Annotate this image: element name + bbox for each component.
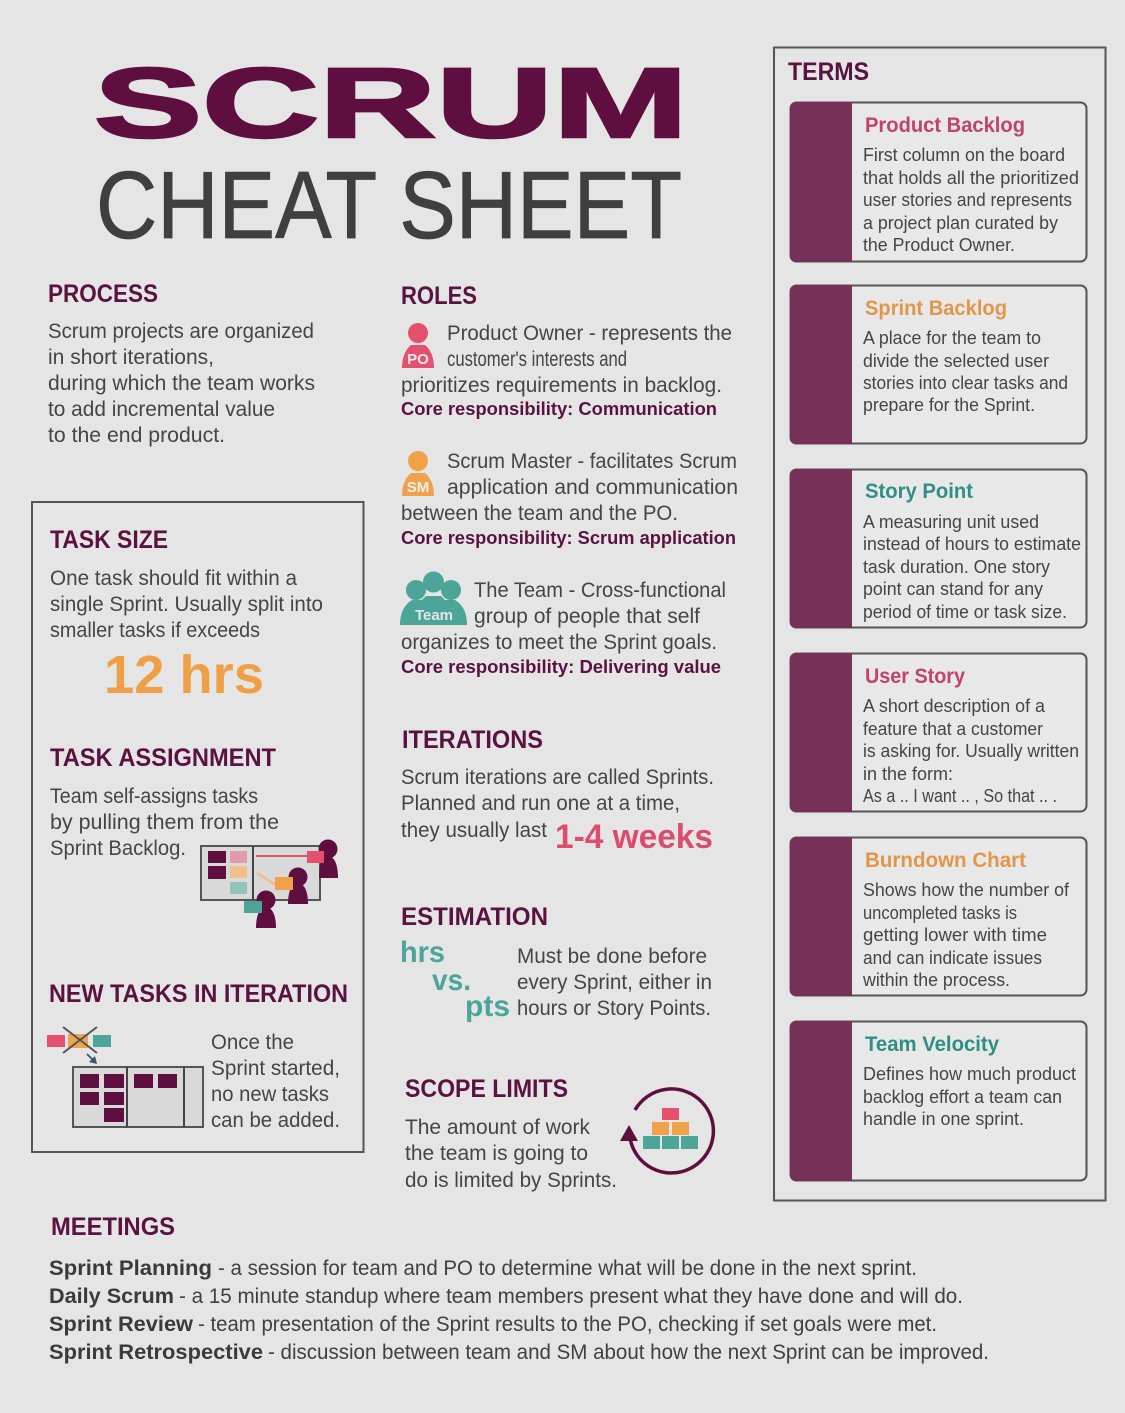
new tasks in iteration: can be added. — [211, 1109, 340, 1132]
term: burndown chart — [790, 837, 1086, 996]
panel: estimation: hrs — [400, 936, 445, 969]
icon: scrum master: SM — [407, 479, 429, 496]
term: product backlog: a project plan curated by — [863, 212, 1059, 233]
panel: process: in short iterations, — [48, 346, 214, 369]
term: team velocity: backlog effort a team can — [863, 1086, 1062, 1107]
term: sprint backlog: stories into clear tasks and — [863, 372, 1068, 393]
task assignment: TASK ASSIGNMENT — [50, 744, 276, 772]
panel: iterations: ITERATIONS — [402, 726, 543, 754]
panel: estimation: every Sprint, either in — [517, 971, 712, 994]
term: sprint backlog: Sprint Backlog — [865, 297, 1007, 320]
panel: scope limits: SCOPE LIMITS — [405, 1075, 568, 1103]
task assignment: by pulling them from the — [50, 811, 279, 834]
title: CHEAT SHEET — [96, 152, 682, 259]
panel: scope limits — [405, 1075, 617, 1192]
term: burndown chart: within the process. — [862, 969, 1010, 990]
team text: group of people that self — [474, 605, 700, 628]
new tasks in iteration: NEW TASKS IN ITERATION — [49, 980, 348, 1008]
term: story point — [790, 469, 1086, 628]
panel: iterations — [401, 726, 714, 856]
panel: meetings: Daily Scrum — [49, 1284, 174, 1308]
panel: meetings — [49, 1213, 989, 1364]
team text: Core responsibility: Delivering value — [401, 656, 721, 677]
panel: task size, assignment and new tasks — [32, 502, 364, 1152]
term: burndown chart: and can indicate issues — [863, 947, 1042, 968]
scrum master text: Scrum Master - facilitates Scrum — [447, 450, 737, 473]
panel: meetings: - team presentation of the Sprint results to the PO, checking if set goals were met. — [198, 1312, 937, 1336]
icon: team — [400, 572, 467, 625]
panel: iterations: 1-4 weeks — [555, 818, 713, 856]
term: product backlog: that holds all the prioritized — [863, 167, 1079, 188]
term: burndown chart: Shows how the number of — [863, 879, 1070, 900]
term: team velocity: handle in one sprint. — [863, 1108, 1024, 1129]
task size: single Sprint. Usually split into — [50, 593, 323, 616]
product owner text: Product Owner - represents the — [447, 322, 732, 345]
term: user story: in the form: — [863, 763, 953, 784]
panel: meetings: - a session for team and PO to determine what will be done in the next sprint. — [218, 1256, 917, 1280]
icon: rejected tasks and board — [47, 1027, 203, 1127]
task size: smaller tasks if exceeds — [50, 619, 260, 642]
product owner text: Core responsibility: Communication — [401, 398, 717, 419]
term: story point: A measuring unit used — [863, 511, 1039, 532]
scrum master text: Core responsibility: Scrum application — [401, 527, 736, 548]
term: product backlog — [790, 102, 1086, 262]
new tasks in iteration: no new tasks — [211, 1083, 329, 1106]
panel: process: to the end product. — [48, 424, 225, 447]
panel: process: during which the team works — [48, 372, 315, 395]
term: sprint backlog: prepare for the Sprint. — [863, 394, 1035, 415]
task size: TASK SIZE — [50, 526, 168, 554]
panel: process: PROCESS — [48, 280, 158, 308]
team text: organizes to meet the Sprint goals. — [401, 631, 717, 654]
term: user story: feature that a customer — [863, 718, 1043, 739]
term: story point: point can stand for any — [863, 578, 1044, 599]
team text: The Team - Cross-functional — [474, 579, 726, 602]
term: team velocity: Team Velocity — [865, 1033, 999, 1056]
term: sprint backlog — [790, 285, 1086, 444]
scrum master text — [401, 450, 738, 548]
term: burndown chart: uncompleted tasks is — [863, 902, 1017, 923]
term: user story: A short description of a — [863, 695, 1046, 716]
term: story point: period of time or task size. — [863, 601, 1067, 622]
term: team velocity — [790, 1021, 1086, 1181]
new tasks in iteration: Sprint started, — [211, 1057, 340, 1080]
product owner text: prioritizes requirements in backlog. — [401, 374, 722, 397]
task assignment — [50, 744, 279, 860]
panel: process — [48, 280, 315, 447]
term: user story — [790, 653, 1086, 812]
panel: scope limits: the team is going to — [405, 1142, 588, 1165]
panel: estimation: ESTIMATION — [401, 903, 548, 931]
panel: estimation: Must be done before — [517, 945, 707, 968]
icon: product owner: PO — [407, 351, 429, 368]
term: product backlog: First column on the board — [863, 144, 1065, 165]
term: burndown chart: Burndown Chart — [865, 849, 1026, 872]
panel: meetings: - a 15 minute standup where team members present what they have done and will do. — [179, 1284, 963, 1308]
term: story point: task duration. One story — [863, 556, 1051, 577]
icon: sprint cycle with task pyramid — [620, 1089, 713, 1173]
term: user story: As a .. I want .. , So that .. . — [863, 785, 1057, 806]
term: product backlog: Product Backlog — [865, 114, 1025, 137]
panel: estimation: vs. — [432, 964, 471, 997]
term: product backlog: user stories and represents — [863, 189, 1072, 210]
panel: iterations: Scrum iterations are called Sprints. — [401, 766, 714, 789]
panel: iterations: Planned and run one at a time, — [401, 792, 680, 815]
panel: meetings: - discussion between team and SM about how the next Sprint can be improved. — [268, 1340, 989, 1364]
panel: meetings: Sprint Planning — [49, 1256, 212, 1280]
title: SCRUM — [94, 47, 688, 158]
panel: scope limits: do is limited by Sprints. — [405, 1169, 617, 1192]
term: burndown chart: getting lower with time — [863, 924, 1047, 945]
task assignment: Team self-assigns tasks — [50, 785, 258, 808]
scrum master text: between the team and the PO. — [401, 502, 678, 525]
panel: meetings: Sprint Review — [49, 1312, 193, 1336]
term: team velocity: Defines how much product — [863, 1063, 1076, 1084]
term: sprint backlog: divide the selected user — [863, 350, 1049, 371]
panel: terms — [774, 48, 1106, 1200]
scrum master text: application and communication — [447, 476, 738, 499]
panel: process: Scrum projects are organized — [48, 320, 314, 343]
task size — [50, 526, 323, 705]
new tasks in iteration: Once the — [211, 1031, 294, 1054]
panel: process: to add incremental value — [48, 398, 275, 421]
panel: meetings: Sprint Retrospective — [49, 1340, 263, 1364]
panel: estimation: pts — [465, 990, 510, 1023]
term: story point: instead of hours to estimate — [863, 533, 1081, 554]
panel: terms: TERMS — [788, 58, 869, 86]
title — [94, 47, 688, 259]
panel: meetings: MEETINGS — [51, 1213, 175, 1241]
product owner text: customer's interests and — [447, 348, 627, 371]
panel: estimation: hours or Story Points. — [517, 997, 711, 1020]
icon: team: Team — [415, 607, 453, 624]
new tasks in iteration — [49, 980, 348, 1132]
task size: 12 hrs — [104, 645, 264, 705]
task assignment: Sprint Backlog. — [50, 837, 186, 860]
product owner text — [401, 322, 732, 419]
panel: iterations: they usually last — [401, 819, 547, 842]
panel: scope limits: The amount of work — [405, 1116, 590, 1139]
term: story point: Story Point — [865, 480, 973, 503]
icon: product owner — [402, 323, 434, 368]
panel: roles: ROLES — [401, 282, 477, 310]
term: product backlog: the Product Owner. — [863, 234, 1015, 255]
task size: One task should fit within a — [50, 567, 297, 590]
panel: estimation — [400, 903, 712, 1023]
term: user story: User Story — [865, 665, 965, 688]
team text — [401, 579, 726, 677]
term: sprint backlog: A place for the team to — [863, 327, 1041, 348]
term: user story: is asking for. Usually written — [863, 740, 1079, 761]
icon: team pulling tasks from board — [201, 840, 338, 928]
panel: roles — [400, 282, 738, 677]
icon: scrum master — [402, 451, 434, 496]
